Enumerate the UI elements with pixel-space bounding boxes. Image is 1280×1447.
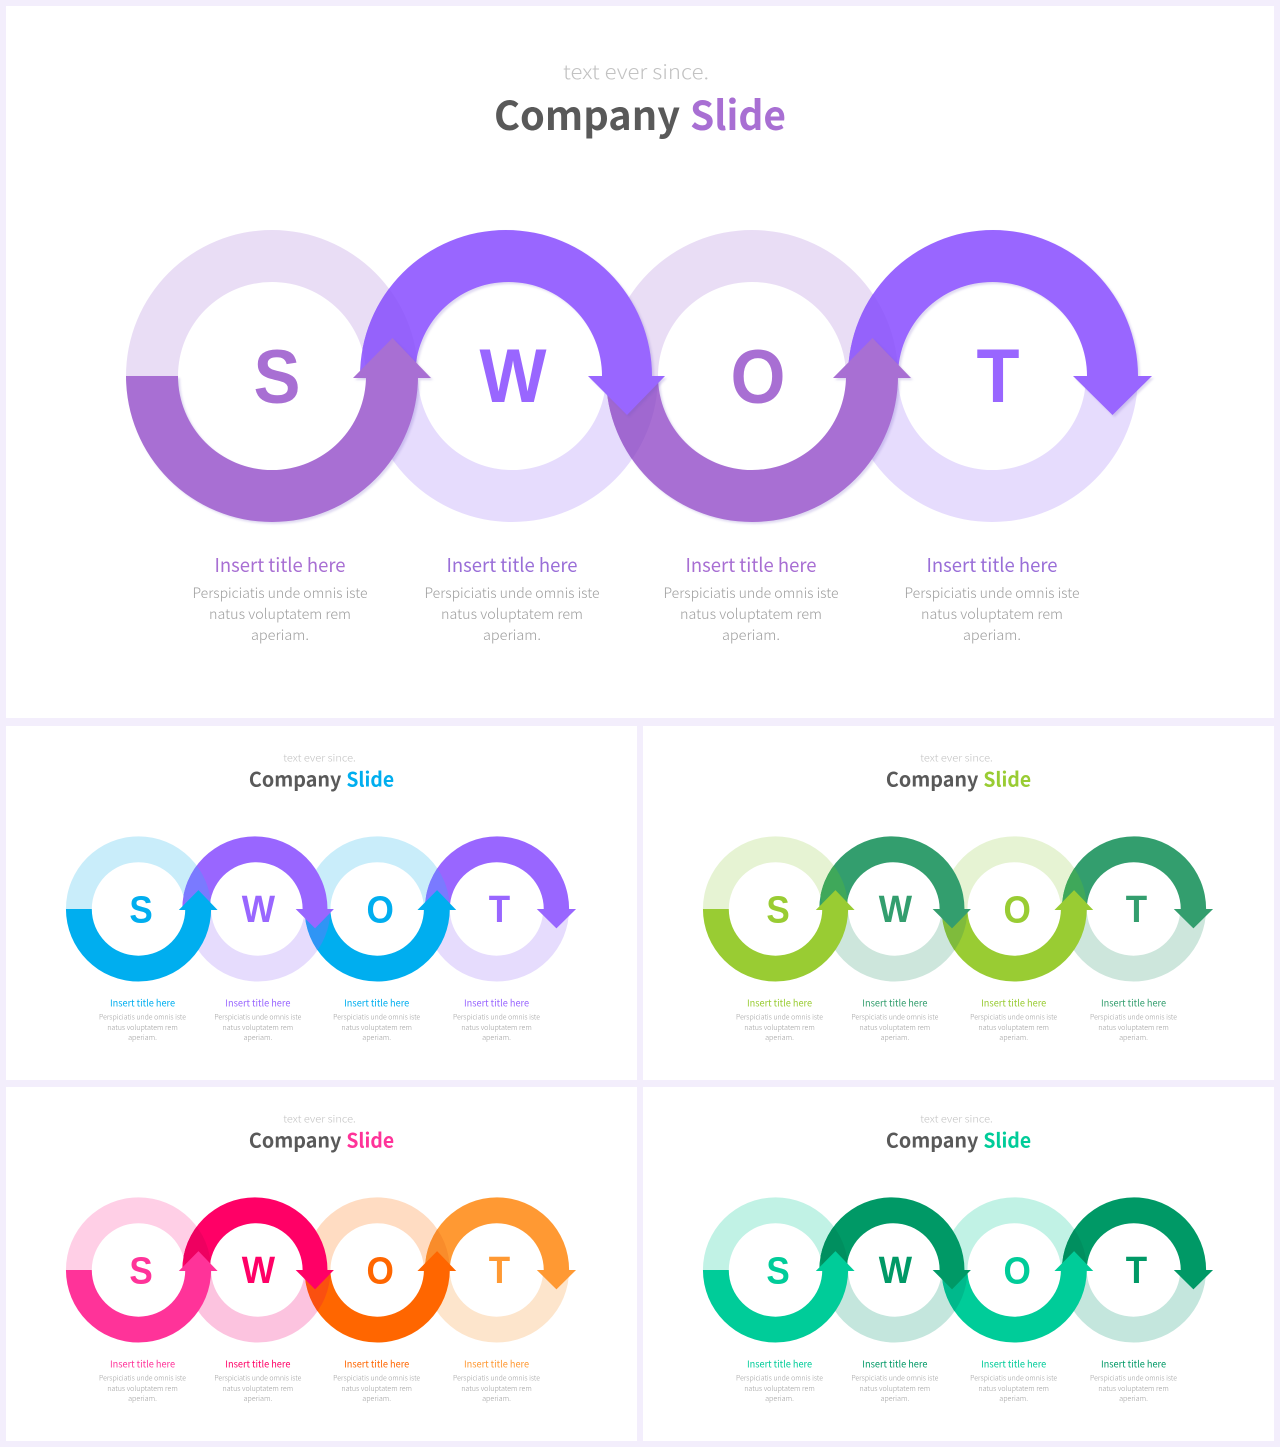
text block: O description: Insert title here	[981, 995, 1046, 1009]
text block: W description: aperiam.	[483, 625, 541, 645]
text block: T description	[904, 551, 1080, 645]
panel: blue and purple SWOT slide	[6, 726, 637, 1080]
text block: S description: Insert title here	[214, 551, 346, 578]
heading: green slide title: Company	[886, 764, 979, 793]
text block: O description: aperiam.	[362, 1033, 391, 1043]
text block: T description: Insert title here	[464, 995, 529, 1009]
text block: S description: aperiam.	[251, 625, 309, 645]
text block: S description	[99, 1356, 186, 1404]
text block: W description: aperiam.	[880, 1394, 910, 1404]
chart: blue SWOT interlocking arrows: S	[129, 889, 153, 931]
text block: W description: Perspiciatis unde omnis iste	[214, 1373, 302, 1383]
text block: S description: Insert title here	[110, 1356, 175, 1370]
text block: T description: aperiam.	[1119, 1394, 1148, 1404]
text block: T description: Perspiciatis unde omnis iste	[1090, 1373, 1177, 1383]
chart: teal SWOT interlocking arrows: S	[766, 1250, 790, 1292]
text block: O description	[664, 551, 838, 645]
text block: T description	[453, 995, 540, 1043]
text block: W description: natus voluptatem rem	[860, 1023, 930, 1033]
text block: W description: Perspiciatis unde omnis iste	[851, 1012, 939, 1022]
chart: pink and orange SWOT interlocking arrows: W	[242, 1250, 275, 1292]
text block: O description: aperiam.	[722, 625, 780, 645]
chart: green SWOT interlocking arrows: S	[766, 889, 790, 931]
text block: T description: natus voluptatem rem	[1098, 1023, 1169, 1033]
chart: pink and orange SWOT interlocking arrows: O	[366, 1250, 394, 1292]
text block: S description	[192, 551, 368, 645]
text block: T description: Insert title here	[926, 551, 1058, 578]
text block: W description	[424, 551, 600, 645]
text block: S description: aperiam.	[128, 1033, 157, 1043]
text block: T description	[1090, 995, 1177, 1043]
text block: W description: aperiam.	[243, 1033, 273, 1043]
text block: W description	[214, 995, 302, 1043]
chart: green SWOT interlocking arrows: W	[879, 889, 912, 931]
text block: W description	[214, 1356, 302, 1404]
text block: S description: natus voluptatem rem	[107, 1384, 178, 1394]
text block: S description: Perspiciatis unde omnis iste	[99, 1012, 186, 1022]
text block: S description: Perspiciatis unde omnis iste	[736, 1373, 823, 1383]
text block: T description: natus voluptatem rem	[461, 1023, 532, 1033]
text block: W description	[851, 995, 939, 1043]
heading: blue slide title: text ever since.	[283, 749, 356, 764]
heading: teal slide title: text ever since.	[920, 1110, 993, 1125]
panel: pink and orange SWOT slide	[6, 1087, 637, 1441]
heading: blue slide title: Slide	[346, 764, 394, 793]
text block: T description: Insert title here	[1101, 995, 1166, 1009]
text block: T description: Perspiciatis unde omnis iste	[1090, 1012, 1177, 1022]
chart: green SWOT interlocking arrows: T	[1126, 889, 1147, 931]
text block: T description: Perspiciatis unde omnis iste	[453, 1012, 540, 1022]
text block: W description	[851, 1356, 939, 1404]
text block: S description: Perspiciatis unde omnis iste	[736, 1012, 823, 1022]
text block: O description: Perspiciatis unde omnis iste	[333, 1012, 420, 1022]
text block: T description: Perspiciatis unde omnis iste	[453, 1373, 540, 1383]
text block: S description: aperiam.	[128, 1394, 157, 1404]
text block: W description: natus voluptatem rem	[441, 604, 583, 624]
chart: SWOT interlocking arrows	[126, 230, 1152, 522]
text block: T description: aperiam.	[482, 1033, 511, 1043]
heading: teal slide title: Company	[886, 1125, 979, 1154]
text block: S description: Insert title here	[110, 995, 175, 1009]
chart: pink and orange SWOT interlocking arrows: S	[129, 1250, 153, 1292]
text block: S description: Perspiciatis unde omnis iste	[99, 1373, 186, 1383]
text block: W description: Insert title here	[446, 551, 578, 578]
text block: T description: aperiam.	[1119, 1033, 1148, 1043]
chart: pink and orange SWOT interlocking arrows	[66, 1197, 576, 1343]
text block: T description	[1090, 1356, 1177, 1404]
text block: W description: Insert title here	[862, 995, 927, 1009]
text block: S description: aperiam.	[765, 1394, 794, 1404]
text block: O description	[333, 995, 420, 1043]
chart: blue SWOT interlocking arrows	[66, 836, 576, 982]
heading: teal slide title	[886, 1110, 1031, 1154]
chart: SWOT interlocking arrows: W	[480, 334, 547, 419]
text block: O description: Insert title here	[981, 1356, 1046, 1370]
heading: pink slide title: Company	[249, 1125, 342, 1154]
heading: green slide title: Slide	[983, 764, 1031, 793]
text block: O description	[333, 1356, 420, 1404]
text block: W description: aperiam.	[880, 1033, 910, 1043]
heading: blue slide title: Company	[249, 764, 342, 793]
text block: O description: aperiam.	[999, 1033, 1028, 1043]
text block: O description: aperiam.	[999, 1394, 1028, 1404]
chart: SWOT interlocking arrows: O	[730, 335, 786, 420]
text block: T description: Insert title here	[464, 1356, 529, 1370]
text block: O description: aperiam.	[362, 1394, 391, 1404]
text block: W description: natus voluptatem rem	[223, 1384, 293, 1394]
chart: SWOT interlocking arrows: S	[254, 335, 300, 420]
text block: O description: natus voluptatem rem	[978, 1023, 1049, 1033]
text block: O description: Insert title here	[344, 995, 409, 1009]
text block: S description: Insert title here	[747, 995, 812, 1009]
text block: W description: Insert title here	[225, 995, 290, 1009]
chart: blue SWOT interlocking arrows: O	[366, 889, 394, 931]
text block: T description: Insert title here	[1101, 1356, 1166, 1370]
panel: green SWOT slide	[643, 726, 1274, 1080]
heading: main slide title: Company	[494, 84, 680, 142]
text block: O description: Perspiciatis unde omnis iste	[970, 1012, 1057, 1022]
text block: S description	[736, 1356, 823, 1404]
text block: S description: aperiam.	[765, 1033, 794, 1043]
text block: T description: natus voluptatem rem	[461, 1384, 532, 1394]
chart: teal SWOT interlocking arrows	[703, 1197, 1213, 1343]
chart: pink and orange SWOT interlocking arrows: T	[489, 1250, 510, 1292]
text block: W description: aperiam.	[243, 1394, 273, 1404]
text block: S description: natus voluptatem rem	[744, 1023, 815, 1033]
text block: O description: Perspiciatis unde omnis iste	[970, 1373, 1057, 1383]
text block: W description: Insert title here	[862, 1356, 927, 1370]
text block: T description: Perspiciatis unde omnis iste	[904, 583, 1080, 603]
text block: T description: natus voluptatem rem	[1098, 1384, 1169, 1394]
text block: O description: natus voluptatem rem	[978, 1384, 1049, 1394]
heading: pink slide title: Slide	[346, 1125, 394, 1154]
text block: S description: natus voluptatem rem	[744, 1384, 815, 1394]
heading: main slide title	[494, 56, 786, 142]
text block: S description: Insert title here	[747, 1356, 812, 1370]
heading: main slide title: text ever since.	[563, 56, 709, 85]
panel: teal SWOT slide	[643, 1087, 1274, 1441]
text block: O description	[970, 1356, 1057, 1404]
panel: main purple SWOT slide	[6, 6, 1274, 718]
text block: W description: Perspiciatis unde omnis iste	[424, 583, 600, 603]
text block: S description: Perspiciatis unde omnis iste	[192, 583, 368, 603]
text block: O description: Perspiciatis unde omnis iste	[664, 583, 838, 603]
text block: S description: natus voluptatem rem	[107, 1023, 178, 1033]
heading: green slide title: text ever since.	[920, 749, 993, 764]
text block: T description	[453, 1356, 540, 1404]
text block: S description	[736, 995, 823, 1043]
text block: O description: Insert title here	[686, 551, 816, 578]
heading: teal slide title: Slide	[983, 1125, 1031, 1154]
chart: teal SWOT interlocking arrows: O	[1003, 1250, 1031, 1292]
text block: S description: natus voluptatem rem	[209, 604, 351, 624]
text block: W description: Insert title here	[225, 1356, 290, 1370]
text block: O description: natus voluptatem rem	[341, 1384, 412, 1394]
text block: W description: Perspiciatis unde omnis iste	[214, 1012, 302, 1022]
chart: green SWOT interlocking arrows	[703, 836, 1213, 982]
chart: green SWOT interlocking arrows: O	[1003, 889, 1031, 931]
chart: blue SWOT interlocking arrows: W	[242, 889, 275, 931]
heading: main slide title: Slide	[690, 84, 786, 142]
chart: teal SWOT interlocking arrows: W	[879, 1250, 912, 1292]
text block: T description: aperiam.	[482, 1394, 511, 1404]
text block: W description: Perspiciatis unde omnis iste	[851, 1373, 939, 1383]
text block: T description: aperiam.	[963, 625, 1021, 645]
heading: pink slide title	[249, 1110, 394, 1154]
text block: O description: natus voluptatem rem	[341, 1023, 412, 1033]
text block: O description: Insert title here	[344, 1356, 409, 1370]
text block: O description: Perspiciatis unde omnis iste	[333, 1373, 420, 1383]
text block: O description	[970, 995, 1057, 1043]
heading: green slide title	[886, 749, 1031, 793]
chart: blue SWOT interlocking arrows: T	[489, 889, 510, 931]
chart: teal SWOT interlocking arrows: T	[1126, 1250, 1147, 1292]
heading: pink slide title: text ever since.	[283, 1110, 356, 1125]
text block: O description: natus voluptatem rem	[680, 604, 822, 624]
text block: S description	[99, 995, 186, 1043]
heading: blue slide title	[249, 749, 394, 793]
text block: W description: natus voluptatem rem	[223, 1023, 293, 1033]
text block: W description: natus voluptatem rem	[860, 1384, 930, 1394]
chart: SWOT interlocking arrows: T	[976, 334, 1020, 419]
text block: T description: natus voluptatem rem	[921, 604, 1063, 624]
